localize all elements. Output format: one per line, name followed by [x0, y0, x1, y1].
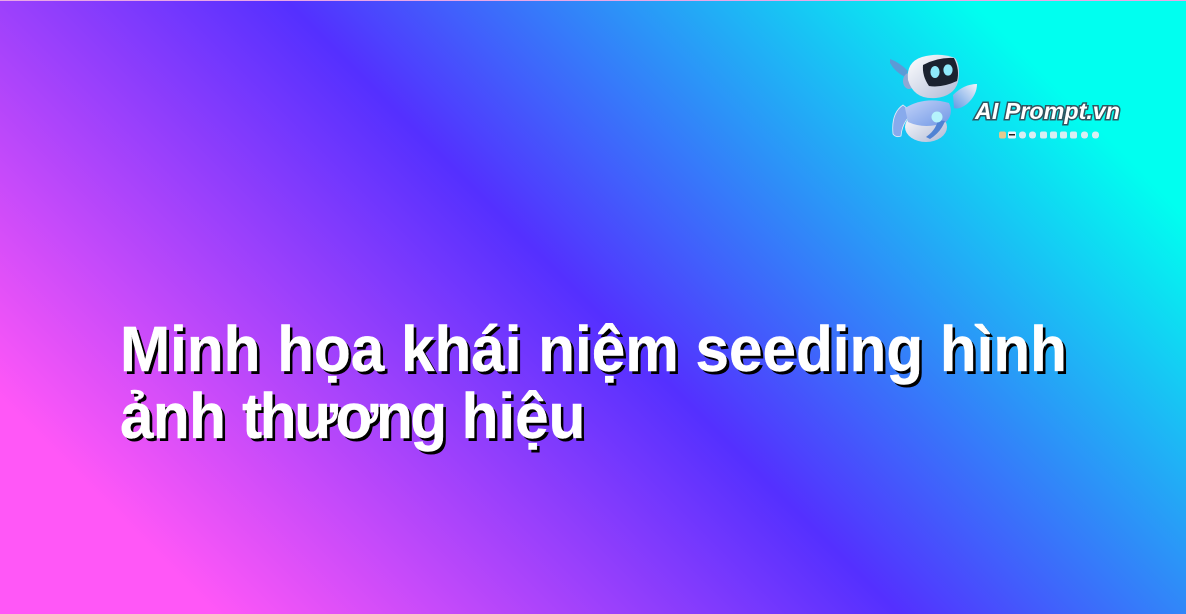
title: ảnh thương hiệu: [120, 380, 585, 452]
top edge line: [0, 0, 1186, 1]
icon: robot mascot: [890, 55, 977, 142]
title: Minh họa khái niệm seeding hình: [120, 313, 1067, 385]
logo icon row: [999, 132, 1099, 138]
title: [120, 313, 1067, 454]
logo wordmark: AI Prompt.vn: [974, 98, 1120, 124]
logo: AI Prompt.vn: [890, 54, 1120, 142]
